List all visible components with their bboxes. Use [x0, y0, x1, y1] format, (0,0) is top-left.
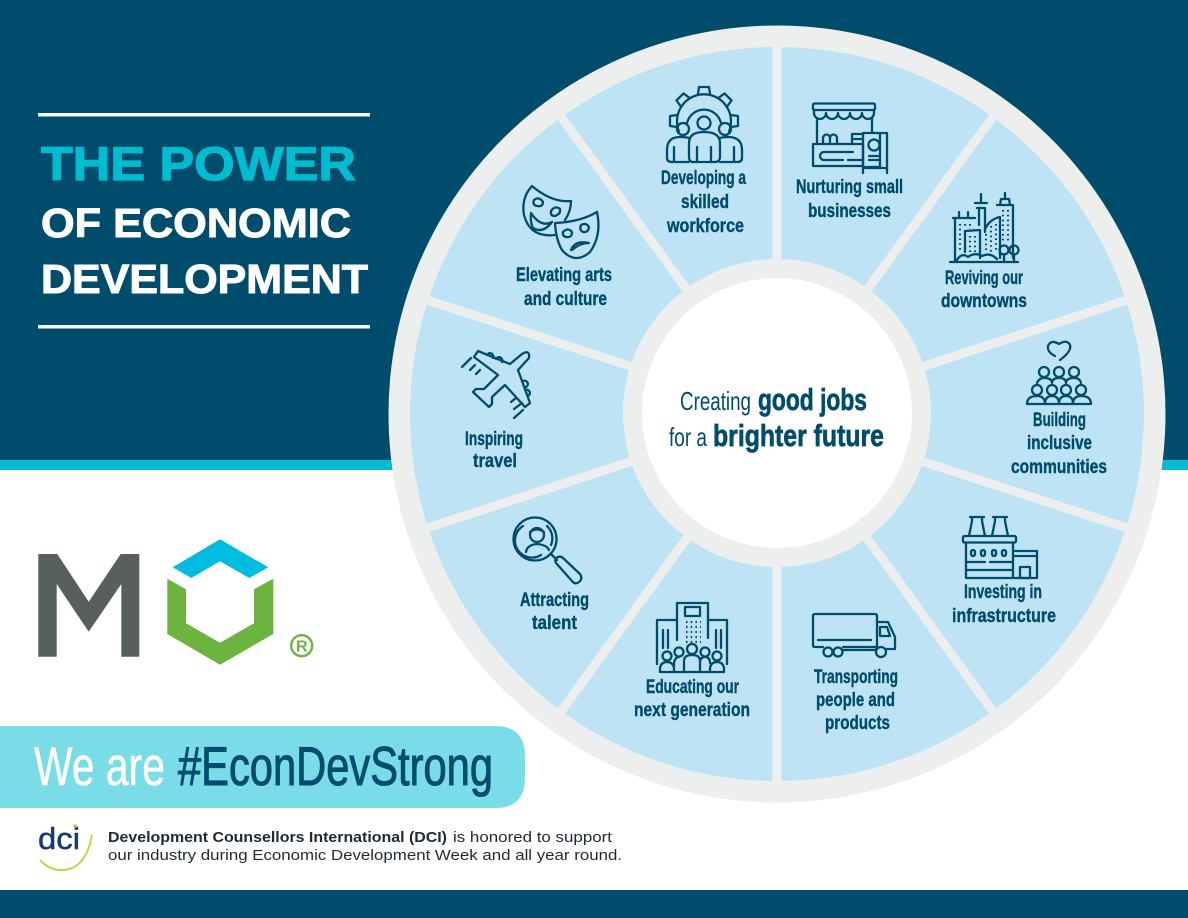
label	[516, 264, 612, 310]
label: inclusive	[1027, 432, 1092, 454]
logo: MO	[38, 539, 312, 665]
segment: elevating arts and culture	[516, 186, 612, 310]
label	[1011, 409, 1107, 478]
title line: development: DEVELOPMENT	[41, 256, 368, 302]
teal stripe	[0, 460, 1188, 470]
label: travel	[473, 450, 517, 472]
label: downtowns	[941, 290, 1027, 312]
icon: market stall	[813, 104, 887, 173]
logo: MO: R	[296, 638, 308, 656]
segment: transporting people and products	[813, 614, 898, 734]
segment: building inclusive communities	[1011, 342, 1107, 478]
label: Transporting	[814, 666, 898, 688]
center message: for a	[669, 422, 707, 452]
label: Investing in	[964, 581, 1042, 603]
title line: the power: THE POWER	[41, 137, 356, 190]
label: next generation	[634, 699, 750, 721]
label: infrastructure	[952, 605, 1056, 627]
segment: inspiring travel	[462, 351, 530, 472]
label: talent	[532, 612, 577, 634]
label	[952, 581, 1056, 627]
banner text: we are: We are	[34, 735, 165, 797]
icon: gear and people	[667, 87, 742, 162]
label: products	[825, 712, 890, 734]
hashtag banner	[0, 726, 525, 808]
label	[796, 176, 903, 222]
label	[814, 666, 898, 734]
label: Inspiring	[465, 428, 523, 450]
label: Nurturing small	[796, 176, 903, 198]
icon: truck	[813, 614, 895, 657]
label: workforce	[666, 215, 744, 237]
icon: magnifying glass with person	[514, 518, 581, 583]
label: Attracting	[520, 589, 589, 611]
dci logo: dci	[38, 821, 80, 856]
segment: developing a skilled workforce	[661, 87, 746, 237]
title line: of economic: OF ECONOMIC	[41, 200, 351, 246]
header background	[0, 0, 1188, 460]
center message: brighter future	[713, 418, 884, 453]
dci statement: Development Counsellors International (DCI)	[108, 829, 447, 846]
title block	[38, 113, 370, 328]
icon: heart and crowd	[1027, 342, 1091, 404]
label: businesses	[808, 200, 891, 222]
icon: school and students	[657, 603, 727, 672]
label: Reviving our	[945, 267, 1023, 289]
center message: Creating	[680, 386, 751, 416]
dci statement	[108, 829, 622, 864]
segment: attracting talent	[514, 518, 589, 634]
footer bar	[0, 890, 1188, 918]
label	[941, 267, 1027, 312]
icon: factory	[963, 517, 1037, 578]
icon: airplane	[462, 351, 530, 418]
segment: investing in infrastructure	[952, 517, 1056, 627]
label	[634, 676, 750, 721]
dci logo	[38, 821, 92, 870]
icon: theatre masks	[523, 186, 598, 258]
dci statement: is honored to support	[453, 829, 613, 846]
label: skilled	[681, 191, 729, 213]
wheel	[388, 26, 1166, 802]
label: people and	[816, 689, 895, 711]
icon: city skyline	[950, 193, 1018, 262]
label: and culture	[524, 288, 607, 310]
center message	[669, 382, 884, 453]
label: communities	[1011, 456, 1107, 478]
label	[661, 167, 746, 237]
label: Educating our	[646, 676, 739, 698]
segment: reviving our downtowns	[941, 193, 1027, 312]
label	[465, 428, 523, 472]
segment: educating our next generation	[634, 603, 750, 721]
label: Developing a	[661, 167, 746, 189]
dci statement: our industry during Economic Development Week and all year round.	[108, 847, 622, 864]
label: Building	[1033, 409, 1086, 431]
segment: nurturing small businesses	[796, 104, 903, 222]
label: Elevating arts	[516, 264, 612, 286]
label	[520, 589, 589, 634]
center message: good jobs	[758, 382, 867, 417]
banner text: hashtag: #EconDevStrong	[178, 735, 493, 797]
